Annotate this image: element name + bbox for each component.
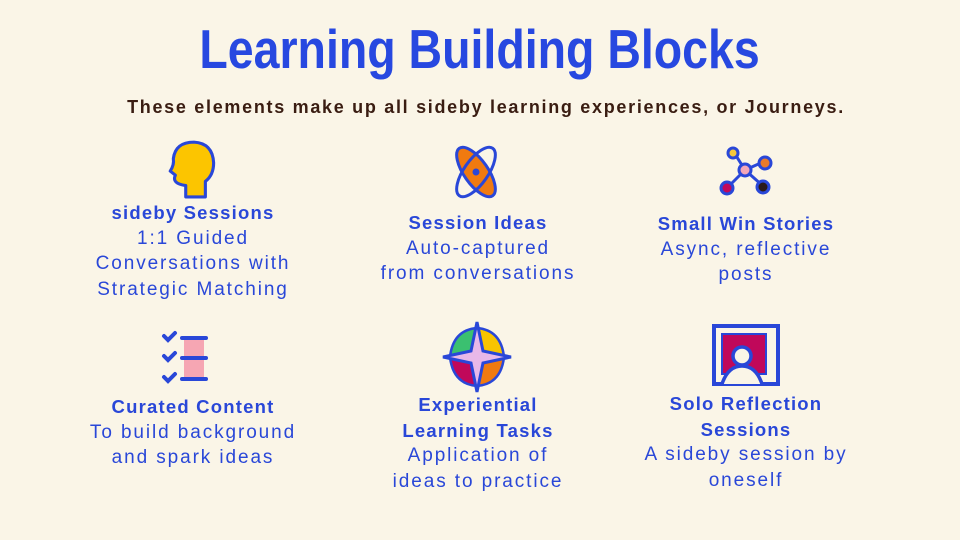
block: curated content: Curated Content [112,396,274,417]
subtitle: These elements make up all sideby learning experiences, or Journeys. [127,97,845,117]
icon: head [168,140,216,198]
block: solo reflection sessions: oneself [709,470,783,490]
block: curated content: and spark ideas [112,447,274,468]
block: curated content: To build background [90,422,296,442]
block: experiential learning tasks [393,394,563,492]
block: solo reflection sessions: Sessions [701,418,791,440]
block: sideby sessions: 1:1 Guided [137,228,249,248]
block: solo reflection sessions [644,393,847,490]
block: small win stories: posts [719,264,773,285]
block: solo reflection sessions: Solo Reflection [670,393,822,414]
block: sideby sessions: sideby Sessions [112,202,274,223]
block: experiential learning tasks: ideas to practice [393,470,563,492]
icon: solo reflection [712,324,780,386]
block: session ideas: Session Ideas [408,212,548,233]
title: Learning Building Blocks [200,18,760,80]
block: curated content [90,396,296,468]
block: session ideas: from conversations [381,263,575,284]
block: experiential learning tasks: Application of [408,445,548,466]
block: small win stories: Async, reflective [661,238,831,260]
block: session ideas [380,212,575,284]
block: session ideas: Auto-captured [406,238,550,258]
block: experiential learning tasks: Learning Tasks [402,420,554,440]
icon: network [720,146,772,196]
block: small win stories: Small Win Stories [658,213,834,234]
block: sideby sessions: Strategic Matching [97,278,289,300]
icon: checklist [162,330,208,384]
icon: atom [455,146,497,198]
block: small win stories [658,213,834,285]
block: experiential learning tasks: Experiential [418,394,538,415]
block: solo reflection sessions: A sideby session by [645,444,847,465]
icon: compass [442,322,512,392]
block: sideby sessions: Conversations with [96,253,290,274]
block: sideby sessions [96,202,290,300]
